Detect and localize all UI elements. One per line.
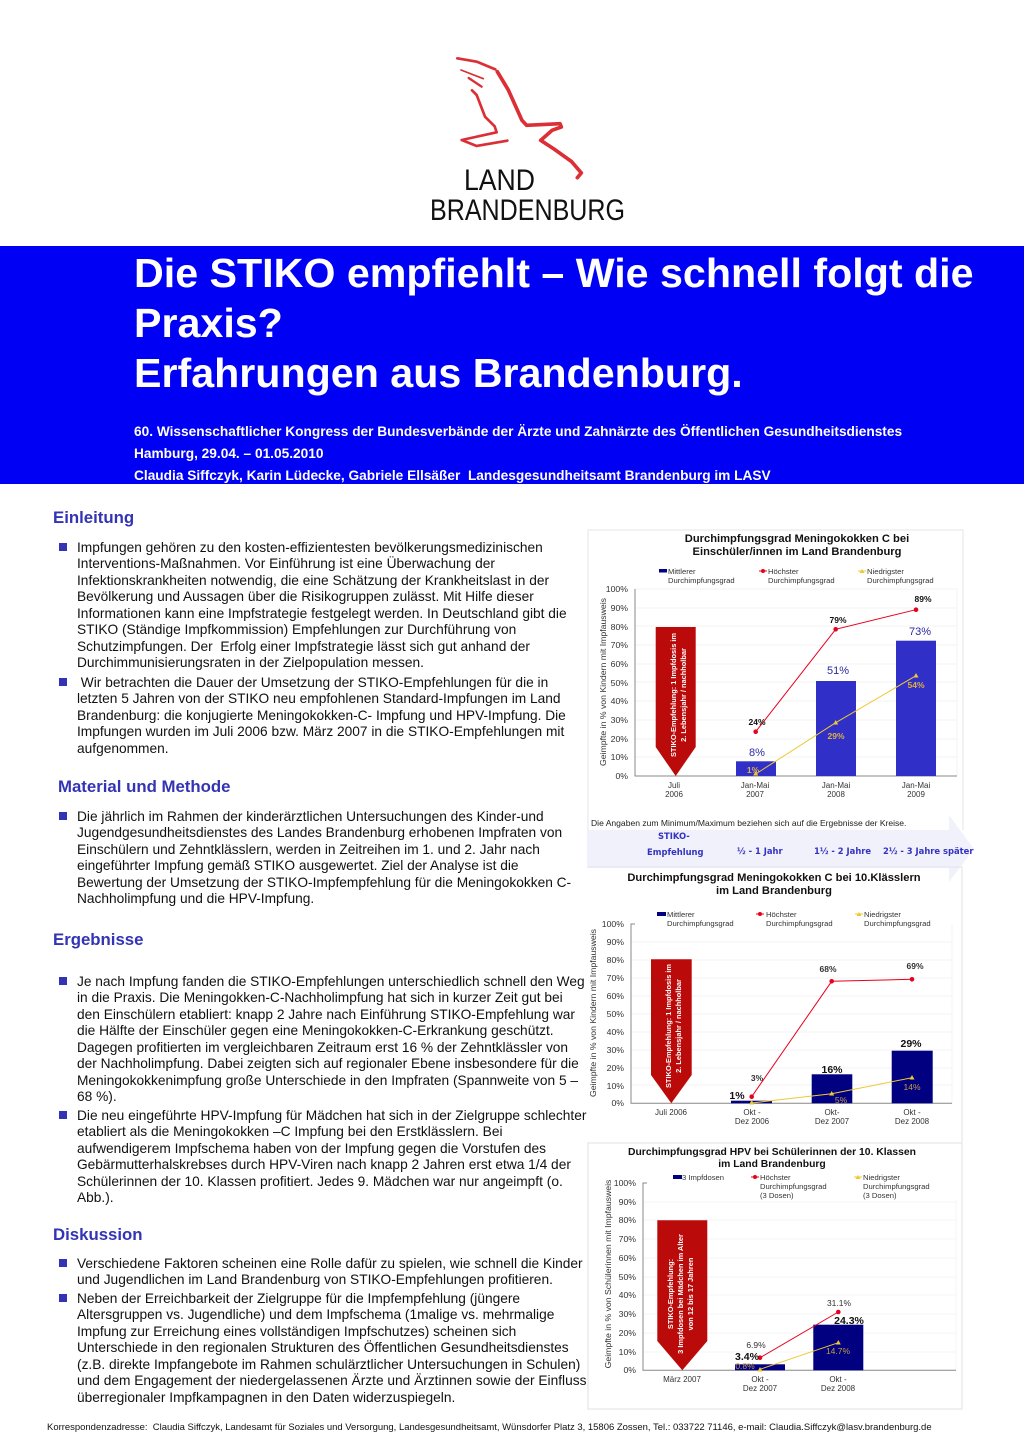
x axis labels: Dez 2007 <box>815 1117 850 1126</box>
label: STIKO-Empfehlung <box>647 831 704 857</box>
heading: Diskussion: Diskussion <box>53 1225 143 1244</box>
arrow: STIKO recommendation: von 12 bis 17 Jahren <box>686 1257 695 1330</box>
x axis labels: 2008 <box>827 790 845 799</box>
x axis labels <box>665 781 930 799</box>
x axis labels: Jan-Mai <box>902 781 930 790</box>
value labels <box>747 594 932 775</box>
value labels: 3.4% <box>735 1351 760 1363</box>
lines <box>753 607 918 776</box>
arrow: STIKO recommendation: STIKO-Empfehlung: <box>666 1259 675 1329</box>
text: Diskussion bullet 2: Impfung zur Erreichung eines vollständigen Impfschutzes) scheinen sich <box>77 1324 516 1339</box>
bars <box>736 641 936 776</box>
logo wordmark: LAND <box>464 164 535 197</box>
logo: Land Brandenburg: BRANDENBURG <box>430 194 625 227</box>
text: Einleitung bullet 2: Brandenburg: die konjugierte Meningokokken-C- Impfung und HPV-Impfung. Die <box>77 708 566 723</box>
legend: Mittlerer <box>667 910 695 919</box>
x axis labels: Dez 2008 <box>821 1384 856 1393</box>
legend: Durchimpfungsgrad <box>768 576 835 585</box>
text: Einleitung bullet 1: Durchimmunisierungsraten in der Zielpopulation messen. <box>77 655 424 670</box>
congress and authors: Hamburg, 29.04. – 01.05.2010 <box>134 446 323 461</box>
value labels: 29% <box>827 731 845 741</box>
x axis labels: Dez 2006 <box>735 1117 770 1126</box>
y axis <box>603 1178 956 1375</box>
main title: Erfahrungen aus Brandenburg. <box>134 350 743 396</box>
legend: Mittlerer <box>668 567 696 576</box>
main title: Die STIKO empfiehlt – Wie schnell folgt die <box>134 250 974 296</box>
text: Material und Methode: Jugendgesundheitsdienstes des Landes Brandenburg erhobenen Impfraten von <box>77 825 562 840</box>
text: Diskussion bullet 2 <box>77 1291 586 1406</box>
text: Ergebnisse bullet 1: Dagegen profitierten im vergleichbaren Zeitraum erst 16 % der Zehntklässler von <box>77 1040 568 1055</box>
text: Material und Methode: eingeführter Impfung gemäß STIKO ausgewertet. Ziel der Analyse ist die <box>77 858 519 873</box>
value labels: 54% <box>907 680 925 690</box>
y axis: 80% <box>607 955 624 965</box>
y axis: 100% <box>614 1178 636 1188</box>
text: Ergebnisse bullet 2: Die neu eingeführte HPV-Impfung für Mädchen hat sich in der Zielgruppe schlechter <box>77 1108 586 1123</box>
bars <box>731 1051 933 1103</box>
congress and authors: Claudia Siffczyk, Karin Lüdecke, Gabriele Ellsäßer Landesgesundheitsamt Brandenburg im LASV <box>134 468 771 483</box>
x axis labels: 2007 <box>746 790 764 799</box>
value labels: 5% <box>835 1095 848 1105</box>
legend: Durchimpfungsgrad <box>867 576 934 585</box>
legend <box>657 910 931 928</box>
value labels: 69% <box>906 961 924 971</box>
x axis labels: 2009 <box>907 790 925 799</box>
x axis labels: 2006 <box>665 790 683 799</box>
x axis labels: Jan-Mai <box>741 781 769 790</box>
x axis labels <box>655 1108 930 1126</box>
label: two and a half to three years: 2½ - 3 Jahre später <box>883 846 974 856</box>
legend: Durchimpfungsgrad <box>766 919 833 928</box>
arrow: STIKO recommendation: 2. Lebensjahr / nachholbar <box>674 979 683 1073</box>
x axis labels: März 2007 <box>663 1375 701 1384</box>
y axis: 30% <box>611 715 628 725</box>
y axis: 20% <box>607 1063 624 1073</box>
footnote: Die Angaben zum Minimum/Maximum beziehen sich auf die Ergebnisse der Kreise. <box>591 818 906 828</box>
x axis labels: Okt - <box>743 1108 761 1117</box>
text: Diskussion bullet 1: Verschiedene Faktoren scheinen eine Rolle dafür zu spielen, wie schnell die Kinder <box>77 1256 583 1271</box>
y axis: 0% <box>611 1098 624 1108</box>
main title <box>134 250 974 396</box>
text: Ergebnisse bullet 1: die Hälfte der Einschüler gegen eine Meningokokken-C-Erkrankung geschützt. <box>77 1023 554 1038</box>
congress and authors: 60. Wissenschaftlicher Kongress der Bundesverbände der Ärzte und Zahnärzte des Öffentlichen Gesundheitsdienstes <box>134 424 902 439</box>
lines <box>749 977 914 1104</box>
x axis labels <box>663 1375 856 1393</box>
y axis: 20% <box>619 1328 636 1338</box>
legend: Durchimpfungsgrad <box>668 576 735 585</box>
y axis: 50% <box>619 1272 636 1282</box>
x axis labels: Okt - <box>751 1375 769 1384</box>
title banner <box>0 246 1024 484</box>
arrow: STIKO recommendation: 2. Lebensjahr / nachholbar <box>679 648 688 742</box>
chart title: Durchimpfungsgrad Meningokokken C bei 10.Klässlern <box>627 872 921 884</box>
arrow: STIKO recommendation: STIKO-Empfehlung: 1 Impfdosis im <box>669 633 678 757</box>
heading: Einleitung: Einleitung <box>53 508 134 527</box>
y axis: 30% <box>619 1309 636 1319</box>
arrow: STIKO recommendation <box>656 627 696 776</box>
value labels: 89% <box>914 594 932 604</box>
main title: Praxis? <box>134 300 283 346</box>
value labels: 8% <box>749 747 765 759</box>
text: Einleitung bullet 2: aufgenommen. <box>77 741 169 756</box>
y axis: 100% <box>606 584 628 594</box>
legend <box>673 1173 930 1200</box>
x axis labels: Okt- <box>824 1108 840 1117</box>
value labels: 29% <box>900 1038 922 1050</box>
value labels <box>729 961 924 1105</box>
y axis: 90% <box>607 937 624 947</box>
label: half to one year: ½ - 1 Jahr <box>737 846 783 856</box>
text: Einleitung bullet 1: Bevölkerung und Aussagen über die Risikogruppen zulässt. Mit Hilfe dieser <box>77 589 534 604</box>
text: Ergebnisse bullet 1: in die Praxis. Die Meningokken-C-Nachholimpfung hat sich in kurzer Zeit gut bei <box>77 990 563 1005</box>
text: Ergebnisse bullet 1: der Nachholimpfung. Dabei zeigten sich auf regionaler Ebene insbesondere für die <box>77 1056 579 1071</box>
value labels: 24.3% <box>834 1315 865 1327</box>
y axis: 10% <box>611 752 628 762</box>
chart title: Durchimpfungsgrad Meningokokken C bei <box>685 533 909 545</box>
chart title <box>628 1147 916 1170</box>
y axis: Geimpfte in % von Kindern mit Impfausweis <box>588 928 598 1097</box>
chart title: Einschüler/innen im Land Brandenburg <box>693 546 902 558</box>
y axis: 20% <box>611 734 628 744</box>
y axis: 80% <box>619 1215 636 1225</box>
text: Einleitung bullet 1: Schutzimpfungen. Der Erfolg einer Impfstrategie lässt sich gut anhand der <box>77 639 530 654</box>
value labels: 1% <box>729 1090 745 1102</box>
timeline arrow band <box>587 815 974 882</box>
text: Material und Methode: Bewertung der Umsetzung der STIKO-Impfempfehlung für die Meningokokken C- <box>77 875 571 890</box>
text: Material und Methode: Einschülern und Zehntklässlern, werden in Zeitreihen im 1. und 2. Jahr nach <box>77 842 540 857</box>
label: STIKO-Empfehlung: STIKO- <box>658 831 690 841</box>
chart: Meningokokken C Einschüler <box>588 530 963 830</box>
text: Diskussion bullet 1 <box>77 1256 583 1289</box>
legend: Durchimpfungsgrad <box>760 1182 827 1191</box>
legend: Durchimpfungsgrad <box>863 1182 930 1191</box>
y axis: 0% <box>615 771 628 781</box>
legend <box>659 567 934 585</box>
value labels <box>735 1298 865 1371</box>
arrow: STIKO recommendation <box>657 1220 707 1370</box>
label: STIKO-Empfehlung: Empfehlung <box>647 847 704 857</box>
y axis: 70% <box>619 1234 636 1244</box>
value labels: 16% <box>821 1064 843 1076</box>
text: Einleitung bullet 2: Impfungen wurden im Juli 2006 bzw. März 2007 in die STIKO-Empfehlungen mit <box>77 724 564 739</box>
legend: Niedrigster <box>864 910 901 919</box>
y axis: 40% <box>611 696 628 706</box>
y axis: 0% <box>623 1365 636 1375</box>
chart title <box>627 872 921 897</box>
x axis labels: Juli 2006 <box>655 1108 688 1117</box>
value labels: 1% <box>747 765 760 775</box>
text: Ergebnisse bullet 1: 68 %). <box>77 1089 117 1104</box>
value labels: 6.9% <box>746 1340 766 1350</box>
legend: (3 Dosen) <box>863 1191 897 1200</box>
chart title: im Land Brandenburg <box>716 885 832 897</box>
text: Diskussion bullet 1: und Jugendlichen im Land Brandenburg von STIKO-Empfehlungen profitieren. <box>77 1272 553 1287</box>
text: Ergebnisse bullet 2: Schülerinnen der 10. Klassen profitiert. Jedes 9. Mädchen war nur angeimpft (o. <box>77 1174 563 1189</box>
y axis: 60% <box>619 1253 636 1263</box>
value labels: 73% <box>909 626 931 638</box>
legend: Höchster <box>766 910 797 919</box>
legend: Niedrigster <box>863 1173 900 1182</box>
legend: 3 Impfdosen <box>682 1173 724 1182</box>
arrow: STIKO recommendation <box>651 959 692 1103</box>
arrow: STIKO recommendation: STIKO-Empfehlung: 1 Impfdosis im <box>664 964 673 1088</box>
y axis: 70% <box>611 640 628 650</box>
value labels: 24% <box>748 717 766 727</box>
y axis: Geimpfte in % von Kindern mit Impfausweis <box>598 597 608 766</box>
y axis <box>588 919 952 1108</box>
legend: Durchimpfungsgrad <box>667 919 734 928</box>
value labels: 3% <box>751 1073 764 1083</box>
text: Material und Methode <box>77 809 571 908</box>
x axis labels: Juli <box>668 781 680 790</box>
legend: Höchster <box>760 1173 791 1182</box>
y axis: 90% <box>619 1197 636 1207</box>
lines <box>758 1310 841 1372</box>
y axis: 60% <box>611 659 628 669</box>
text: Diskussion bullet 2: und dem Engagement der niedergelassenen Ärzte und Ärztinnen sowie der Einfluss <box>77 1373 586 1388</box>
value labels: 79% <box>829 615 847 625</box>
text: Material und Methode: Nachholimpfung und die HPV-Impfung. <box>77 891 314 906</box>
value labels: 51% <box>827 665 849 677</box>
x axis labels: Jan-Mai <box>822 781 850 790</box>
y axis <box>598 584 957 781</box>
y axis: 40% <box>607 1027 624 1037</box>
arrow: STIKO recommendation: 3 Impfdosen bei Mädchen im Alter <box>676 1234 685 1354</box>
text: Ergebnisse bullet 1: den Einschülern etabliert: knapp 2 Jahre nach Einführung STIKO-Empfehlung war <box>77 1007 575 1022</box>
text: Einleitung bullet 1 <box>77 540 567 671</box>
text: Einleitung bullet 1: Infektionskrankheiten notwendig, die eine Schätzung der Krankheitslast in der <box>77 573 549 588</box>
x axis labels: Dez 2007 <box>743 1384 778 1393</box>
y axis: 90% <box>611 603 628 613</box>
value labels: 0.8% <box>735 1361 755 1371</box>
label: one and a half to two years: 1½ - 2 Jahre <box>814 846 871 856</box>
legend: Niedrigster <box>867 567 904 576</box>
y axis: 50% <box>607 1009 624 1019</box>
text: Ergebnisse bullet 2: etabliert als die Meningokokken –C Impfung bei den Erstklässlern. Bei <box>77 1124 503 1139</box>
x axis labels: Okt - <box>903 1108 921 1117</box>
x axis labels: Dez 2008 <box>895 1117 930 1126</box>
chart title <box>685 533 909 558</box>
legend: Durchimpfungsgrad <box>864 919 931 928</box>
y axis: 60% <box>607 991 624 1001</box>
text: Diskussion bullet 2: Neben der Erreichbarkeit der Zielgruppe für die Impfempfehlung (jüngere <box>77 1291 520 1306</box>
footer: correspondence address: Korrespondenzadresse: Claudia Siffczyk, Landesamt für Soziales und Versorgung, Landesgesundheitsamt, Wünsdorfer Platz 3, 15806 Zossen, Tel.: 033722 71146, e-mail: Claudia.Siffczyk@lasv.brandenburg.de <box>47 1422 932 1433</box>
text: Ergebnisse bullet 2: Gebärmutterhalskrebses durch HPV-Viren nach knapp 2 Jahren erst etwa 1/4 der <box>77 1157 571 1172</box>
text: Diskussion bullet 2: (z.B. direkte Impfangebote im Rahmen schulärztlicher Untersuchungen in Schulen) <box>77 1357 580 1372</box>
value labels: 31.1% <box>827 1298 851 1308</box>
congress and authors <box>134 424 902 483</box>
y axis: 30% <box>607 1045 624 1055</box>
text: Einleitung bullet 1: STIKO (Ständige Impfkommission) Empfehlungen zur Durchführung von <box>77 622 516 637</box>
text: Einleitung bullet 2: letzten 5 Jahren von der STIKO neu empfohlenen Standard-Impfungen im Land <box>77 691 561 706</box>
x axis labels: Okt - <box>829 1375 847 1384</box>
legend: Höchster <box>768 567 799 576</box>
y axis: 70% <box>607 973 624 983</box>
text: Einleitung bullet 1: Interventions-Maßnahmen. Vor Einführung ist eine Überwachung der <box>77 556 495 571</box>
chart: Meningokokken C 10. Klässler <box>588 867 962 1143</box>
y axis: 40% <box>619 1290 636 1300</box>
text: Ergebnisse bullet 1: Meningokokkenimpfung große Unterschiede in den Impfraten (Spannweite von 5 – <box>77 1073 578 1088</box>
text: Ergebnisse bullet 2: Abb.). <box>77 1190 114 1205</box>
text: Material und Methode: Die jährlich im Rahmen der kinderärztlichen Untersuchungen des Kinder-und <box>77 809 544 824</box>
y axis: 50% <box>611 678 628 688</box>
text: Einleitung bullet 2: Wir betrachten die Dauer der Umsetzung der STIKO-Empfehlungen für die in <box>81 675 548 690</box>
chart title: im Land Brandenburg <box>718 1159 826 1170</box>
bars <box>735 1325 863 1370</box>
value labels: 68% <box>819 964 837 974</box>
y axis: 100% <box>602 919 624 929</box>
icon: red eagle <box>457 58 581 178</box>
logo: Land Brandenburg <box>430 58 625 227</box>
y axis: 80% <box>611 622 628 632</box>
text: Ergebnisse bullet 1 <box>77 974 585 1105</box>
text: Einleitung bullet 1: Impfungen gehören zu den kosten-effizientesten bevölkerungsmedizinischen <box>77 540 543 555</box>
value labels: 14% <box>903 1082 921 1092</box>
text: Diskussion bullet 2: Altersgruppen vs. Jugendliche) und dem Impfschema (1malige vs. mehrmalige <box>77 1307 554 1322</box>
value labels: 14.7% <box>826 1346 850 1356</box>
chart title: Durchimpfungsgrad HPV bei Schülerinnen der 10. Klassen <box>628 1147 916 1158</box>
text: Einleitung bullet 1: Informationen kann eine Impfstrategie festgelegt werden. In Deutschland gibt die <box>77 606 567 621</box>
y axis: Geimpfte in % von Schülerinnen mit Impfausweis <box>603 1179 613 1368</box>
legend: (3 Dosen) <box>760 1191 794 1200</box>
text: Ergebnisse bullet 2: aufwendigerem Impfschema haben von der Impfung gegen die Vorstufen des <box>77 1141 546 1156</box>
text: Diskussion bullet 2: überregionaler Impfkampagnen in den Daten widerzuspiegeln. <box>77 1390 455 1405</box>
text: Diskussion bullet 2: Unterschiede in den regionalen Strukturen des Öffentlichen Gesundheitsdienstes <box>77 1340 569 1355</box>
chart: HPV Schülerinnen 10. Klassen <box>588 1143 962 1409</box>
y axis: 10% <box>607 1081 624 1091</box>
y axis: 10% <box>619 1347 636 1357</box>
heading: Material und Methode: Material und Methode <box>58 777 230 796</box>
text: Ergebnisse bullet 2 <box>77 1108 586 1207</box>
heading: Ergebnisse: Ergebnisse <box>53 930 143 949</box>
text: Ergebnisse bullet 1: Je nach Impfung fanden die STIKO-Empfehlungen unterschiedlich schnell den Weg <box>77 974 585 989</box>
text: Einleitung bullet 2 <box>77 675 566 757</box>
